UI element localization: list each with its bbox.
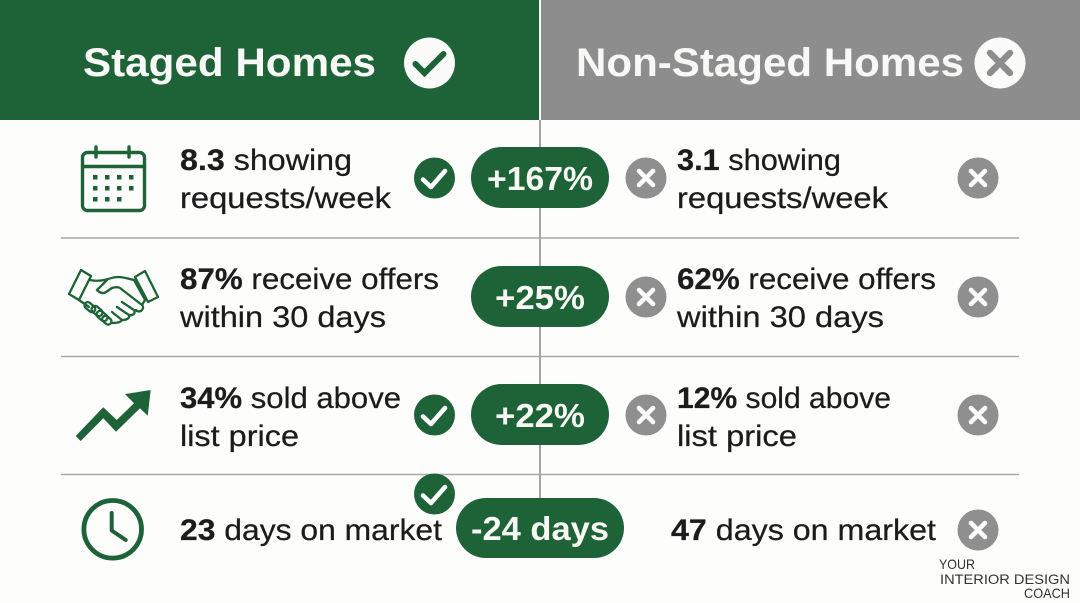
logo: your interior design coach: YOUR <box>939 556 975 572</box>
text: staged offers: 87% receive offers <box>180 263 439 296</box>
logo: your interior design coach: COACH <box>1024 585 1070 601</box>
text: staged list price <box>180 382 401 453</box>
header: non-staged homes <box>541 0 1080 120</box>
icon: cross <box>958 158 998 198</box>
icon: cross <box>958 394 998 436</box>
heading: staged homes: Staged Homes <box>83 41 376 85</box>
text: non-staged days on market: 47 days on market <box>671 514 937 547</box>
icon: cross <box>958 510 998 550</box>
pill: +25%: +25% <box>495 279 585 316</box>
text: non-staged showing requests: requests/week <box>677 182 889 215</box>
icon: check <box>414 474 455 514</box>
text: non-staged showing requests: 3.1 showing <box>677 144 841 177</box>
icon: trending arrow <box>76 390 151 441</box>
text: non-staged offers: 62% receive offers <box>677 263 936 296</box>
pill: +22% <box>471 384 609 445</box>
icon: header cross <box>974 38 1026 88</box>
icon: calendar <box>82 147 144 210</box>
text: staged showing requests: requests/week <box>180 182 392 215</box>
text: non-staged list price: list price <box>677 420 797 453</box>
text: staged offers <box>179 263 439 334</box>
text: staged showing requests <box>180 144 392 215</box>
text: non-staged showing requests <box>677 144 889 215</box>
header: staged homes <box>0 0 539 120</box>
icon: cross <box>626 394 666 436</box>
logo: your interior design coach: INTERIOR DESIGN <box>940 571 1070 587</box>
pill: +25% <box>471 266 609 327</box>
icon: handshake <box>69 270 158 326</box>
text: non-staged list price <box>677 382 891 453</box>
icon: clock <box>84 500 142 558</box>
row: sold above list price <box>76 382 998 453</box>
icon: cross <box>958 276 998 318</box>
heading: non-staged homes: Non-Staged Homes <box>576 41 964 85</box>
icon: check <box>414 158 455 198</box>
text: staged list price: 34% sold above <box>180 382 401 415</box>
pill: -24 days: -24 days <box>471 510 609 547</box>
text: non-staged list price: 12% sold above <box>677 382 891 415</box>
icon: cross <box>626 276 666 318</box>
text: non-staged offers <box>676 263 936 334</box>
row: showing requests <box>82 144 998 215</box>
icon: cross <box>626 158 666 198</box>
pill: +22%: +22% <box>495 397 585 434</box>
row: receive offers <box>69 263 998 334</box>
text: staged offers: within 30 days <box>179 301 386 334</box>
pill: +167% <box>471 147 609 208</box>
logo: your interior design coach <box>939 556 1070 601</box>
pill: +167%: +167% <box>487 160 593 197</box>
pill: -24 days <box>456 498 624 558</box>
row: days on market <box>84 474 998 558</box>
text: staged days on market: 23 days on market <box>180 514 443 547</box>
text: non-staged offers: within 30 days <box>676 301 884 334</box>
text: staged showing requests: 8.3 showing <box>180 144 352 177</box>
icon: header check <box>404 38 455 88</box>
text: staged list price: list price <box>180 420 299 453</box>
icon: check <box>414 394 455 436</box>
